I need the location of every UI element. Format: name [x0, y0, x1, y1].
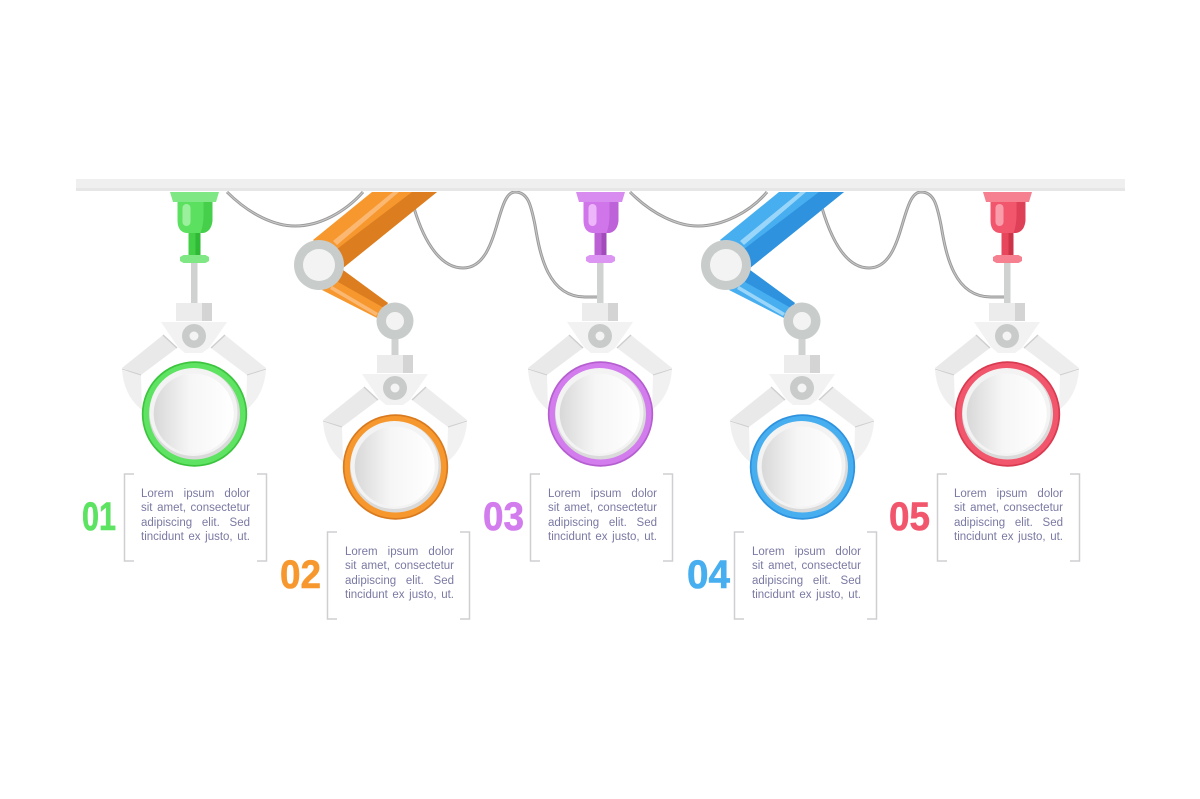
- orange claw: [323, 355, 467, 462]
- blue claw: [730, 355, 874, 462]
- number 02: 02: [280, 553, 321, 597]
- blue arm: [701, 192, 844, 355]
- text block: step 4: tincidunt ex justo, ut.: [752, 589, 861, 601]
- text block: step 4: Lorem ipsum dolor: [752, 546, 861, 558]
- text block: step 2: Lorem ipsum dolor: [345, 546, 454, 558]
- text block: step 5: adipiscing elit. Sed: [954, 517, 1063, 529]
- unit 2: orange arm and gripper: [294, 192, 467, 520]
- number 01: 01: [82, 495, 116, 539]
- unit 1: green gripper: [122, 192, 266, 467]
- text block: step 3: Lorem ipsum dolor: [548, 488, 657, 500]
- text block: step 3: [548, 488, 657, 543]
- green mount: [170, 192, 219, 263]
- text block: step 2: adipiscing elit. Sed: [345, 575, 454, 587]
- red rod: [1004, 263, 1010, 303]
- cable: from arm 2 to unit 3: [414, 192, 598, 297]
- purple ring: [548, 361, 653, 467]
- text block: step 3: sit amet, consectetur: [548, 502, 657, 514]
- red mount: [983, 192, 1032, 263]
- text block: step 2: sit amet, consectetur: [345, 560, 454, 572]
- number 03: 03: [483, 495, 524, 539]
- blue ring: [750, 414, 855, 520]
- text block: step 4: adipiscing elit. Sed: [752, 575, 861, 587]
- text block: step 4: [752, 546, 861, 601]
- text block: step 2: tincidunt ex justo, ut.: [345, 589, 454, 601]
- text block: step 5: Lorem ipsum dolor: [954, 488, 1063, 500]
- purple mount: [576, 192, 625, 263]
- cable: between units 3 and 4: [630, 192, 767, 226]
- red ring: [955, 361, 1060, 467]
- unit 4: blue arm and gripper: [701, 192, 874, 520]
- cable: between units 1 and 2: [227, 192, 363, 226]
- bracket: step 1: [124, 474, 266, 561]
- text block: step 5: [954, 488, 1063, 543]
- text block: step 1: tincidunt ex justo, ut.: [141, 531, 250, 543]
- text block: step 2: [345, 546, 454, 601]
- unit 3: purple gripper: [528, 192, 672, 467]
- unit 5: red gripper: [935, 192, 1079, 467]
- cable: from arm 4 to unit 5: [822, 192, 1005, 297]
- text block: step 1: adipiscing elit. Sed: [141, 517, 250, 529]
- orange ring: [343, 414, 448, 520]
- bracket: step 4: [734, 532, 876, 619]
- purple claw: [528, 303, 672, 410]
- text block: step 5: tincidunt ex justo, ut.: [954, 531, 1063, 543]
- text block: step 4: sit amet, consectetur: [752, 560, 861, 572]
- text block: step 5: sit amet, consectetur: [954, 502, 1063, 514]
- text block: step 3: tincidunt ex justo, ut.: [548, 531, 657, 543]
- green claw: [122, 303, 266, 410]
- number 04: 04: [687, 553, 731, 597]
- text block: step 1: sit amet, consectetur: [141, 502, 250, 514]
- bracket: step 3: [530, 474, 672, 561]
- ceiling rail: [76, 179, 1125, 191]
- purple rod: [597, 263, 604, 303]
- bracket: step 2: [328, 532, 470, 619]
- bracket: step 5: [938, 474, 1080, 561]
- number 05: 05: [889, 495, 930, 539]
- red claw: [935, 303, 1079, 410]
- orange arm: [294, 192, 437, 355]
- green ring: [142, 361, 247, 467]
- text block: step 3: adipiscing elit. Sed: [548, 517, 657, 529]
- green rod: [191, 263, 198, 303]
- text block: step 1: Lorem ipsum dolor: [141, 488, 250, 500]
- text block: step 1: [141, 488, 250, 543]
